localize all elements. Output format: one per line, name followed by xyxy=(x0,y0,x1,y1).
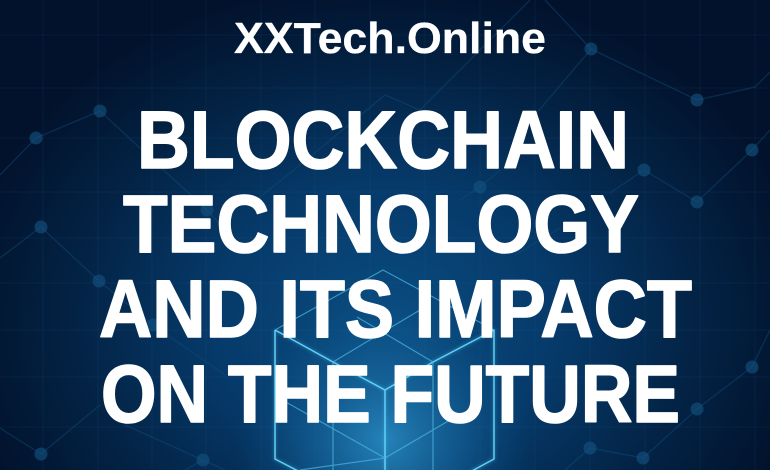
title line 1: BLOCKCHAIN xyxy=(137,95,629,186)
title xyxy=(99,95,692,440)
central glow xyxy=(200,270,570,470)
title line 3: AND ITS IMPACT xyxy=(99,264,692,355)
site name: XXTech.Online xyxy=(234,14,546,63)
cube bright edges xyxy=(275,330,494,470)
title line 2: TECHNOLOGY xyxy=(123,179,639,270)
icon: glowing blockchain cube xyxy=(275,270,494,470)
title line 4: ON THE FUTURE xyxy=(101,349,680,440)
cube glow halo xyxy=(275,330,494,470)
cube inner edges xyxy=(275,270,494,470)
